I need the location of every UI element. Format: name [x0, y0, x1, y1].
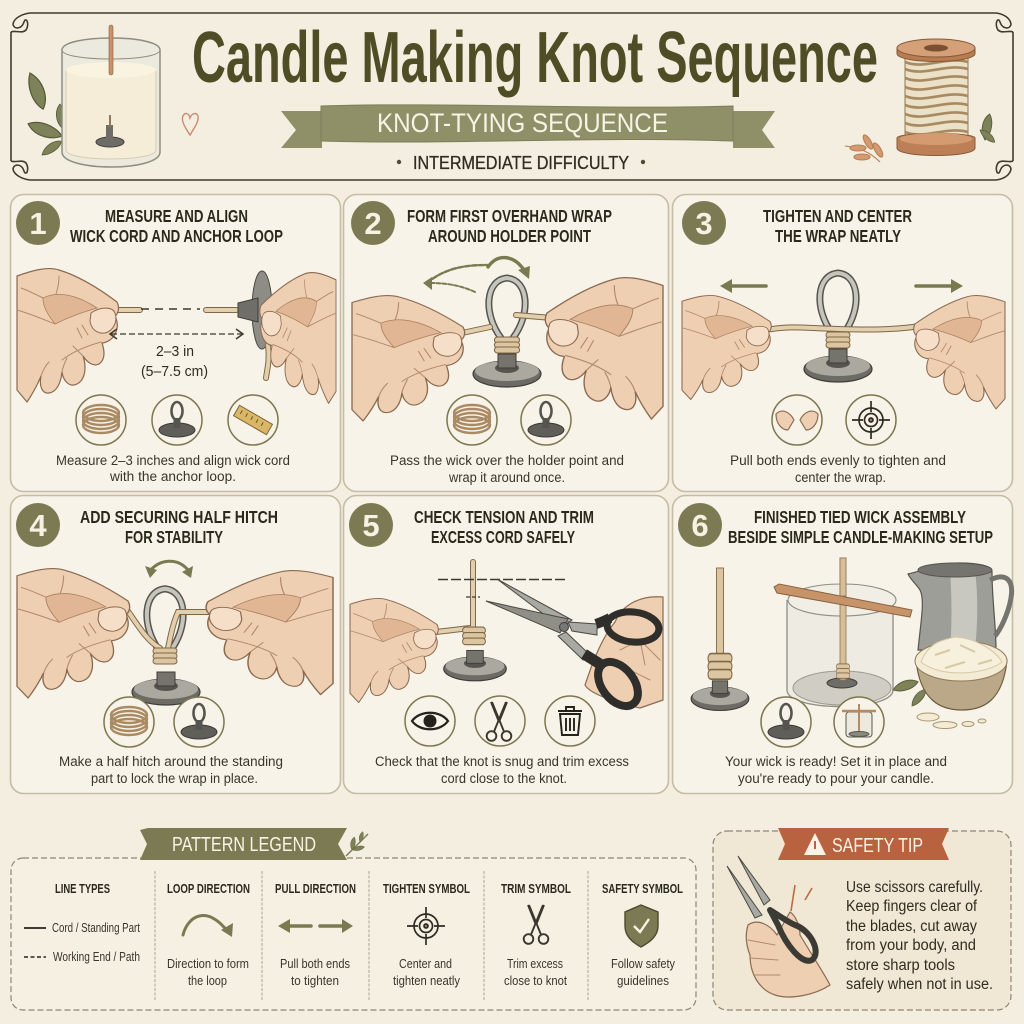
step number 3: 3: [695, 206, 713, 241]
legend: tighten symbol: [383, 881, 470, 988]
step 6 heading: FINISHED TIED WICK ASSEMBLY: [754, 507, 966, 527]
step 6 heading: [728, 507, 993, 547]
step 2 heading: AROUND HOLDER POINT: [428, 226, 591, 246]
step 2 instruction: [390, 453, 624, 485]
step 2 heading: [407, 206, 612, 246]
illustration: half hitch: [17, 561, 333, 705]
legend: pull direction: PULL DIRECTION: [275, 881, 356, 896]
panel: step 2: [344, 194, 668, 492]
legend: loop direction: [167, 881, 250, 988]
illustration: trimming the cord: [350, 562, 663, 714]
icon: wick coil: [104, 697, 154, 747]
step 6 instruction: you're ready to pour your candle.: [738, 771, 934, 786]
candle in glass jar: [24, 25, 160, 167]
step 1 heading: MEASURE AND ALIGN: [105, 206, 248, 226]
panel: step 3: [672, 194, 1012, 492]
step 4 instruction: Make a half hitch around the standing: [59, 754, 283, 769]
step number 5: 5: [362, 508, 380, 543]
step number 2: [351, 201, 395, 245]
panel: step 1: [10, 194, 340, 492]
step 3 instruction: center the wrap.: [795, 470, 886, 485]
heart doodle: [182, 114, 198, 135]
illustration: bowl of wax flakes: [891, 637, 1007, 728]
illustration: pulling to tighten: [682, 273, 1005, 409]
measurement label: 2–3 in: [156, 343, 194, 360]
step 6 instruction: Your wick is ready! Set it in place and: [725, 754, 947, 769]
safety ribbon heading: SAFETY TIP: [832, 835, 923, 857]
step 4 instruction: [59, 754, 283, 786]
icon: anchor: [152, 395, 202, 445]
safety ribbon heading: [778, 828, 949, 860]
icon: wick in glass: [834, 697, 884, 747]
legend: loop direction: Direction to form: [167, 957, 249, 971]
legend: line types: Working End / Path: [53, 950, 140, 964]
legend ribbon heading: PATTERN LEGEND: [172, 834, 316, 856]
safety text: from your body, and: [846, 937, 976, 954]
legend: pull direction: Pull both ends: [280, 957, 350, 971]
step number 4: 4: [29, 508, 47, 543]
legend ribbon heading: [140, 828, 347, 860]
step 4 heading: [80, 507, 278, 547]
legend: tighten symbol: TIGHTEN SYMBOL: [383, 881, 470, 896]
step 5 instruction: Check that the knot is snug and trim excess: [375, 754, 629, 769]
legend: line types: [24, 881, 140, 964]
step 5 heading: CHECK TENSION AND TRIM: [414, 507, 594, 527]
measurement label: [141, 343, 208, 380]
legend: trim symbol: TRIM SYMBOL: [501, 881, 571, 896]
step number 1: [16, 201, 60, 245]
safety text: the blades, cut away: [846, 918, 977, 935]
ornamental frame: [11, 13, 1013, 180]
panel: step 6: [672, 496, 1012, 794]
icon: anchor: [521, 395, 571, 445]
illustration: wrapping around the holder: [352, 258, 663, 421]
legend: tighten symbol: Center and: [399, 957, 452, 971]
step 4 heading: ADD SECURING HALF HITCH: [80, 507, 278, 527]
legend: loop direction: the loop: [188, 974, 227, 988]
safety text: Keep fingers clear of: [846, 898, 978, 915]
step 1 instruction: Measure 2–3 inches and align wick cord: [56, 453, 290, 468]
step 3 instruction: [730, 453, 946, 485]
icon: scissors: [475, 696, 525, 746]
legend: pull direction: [275, 881, 356, 988]
icon: wick coil: [76, 395, 126, 445]
icon: trash can: [545, 696, 595, 746]
step 5 heading: [414, 507, 594, 547]
step 5 instruction: cord close to the knot.: [441, 771, 567, 786]
safety text: safely when not in use.: [846, 976, 993, 993]
illustration: finished wick: [691, 568, 749, 710]
step 4 heading: FOR STABILITY: [125, 527, 223, 547]
icon: anchor: [761, 697, 811, 747]
step 4 instruction: part to lock the wrap in place.: [91, 771, 258, 786]
safety text: Use scissors carefully.: [846, 879, 983, 896]
panel: step 5: [344, 496, 668, 794]
legend: tighten symbol: tighten neatly: [393, 974, 461, 988]
step number 6: 6: [691, 508, 709, 543]
difficulty line: INTERMEDIATE DIFFICULTY: [413, 152, 629, 173]
icon: wick coil: [447, 395, 497, 445]
step number 1: 1: [29, 206, 47, 241]
measurement label: (5–7.5 cm): [141, 363, 208, 380]
step 3 heading: THE WRAP NEATLY: [775, 226, 901, 246]
legend: safety symbol: SAFETY SYMBOL: [602, 881, 683, 896]
panel: pattern legend: [11, 828, 696, 1010]
step number 2: 2: [364, 206, 382, 241]
illustration: glass with centering stick: [774, 558, 912, 706]
step number 3: [682, 201, 726, 245]
step 5 heading: EXCESS CORD SAFELY: [431, 527, 575, 547]
illustration: hand holding scissors: [727, 856, 830, 997]
legend: pull direction: to tighten: [291, 974, 339, 988]
step 6 instruction: [725, 754, 947, 786]
legend: loop direction: LOOP DIRECTION: [167, 881, 250, 896]
ribbon subtitle: KNOT-TYING SEQUENCE: [377, 108, 668, 138]
step 2 heading: FORM FIRST OVERHAND WRAP: [407, 206, 612, 226]
step 1 heading: WICK CORD AND ANCHOR LOOP: [70, 226, 283, 246]
step 5 instruction: [375, 754, 629, 786]
panel: safety tip: [713, 828, 1011, 1010]
step number 6: [678, 503, 722, 547]
legend: safety symbol: [602, 881, 683, 988]
step 1 instruction: [56, 453, 290, 484]
wick spool: [845, 39, 997, 162]
illustration: pouring pitcher: [908, 563, 1012, 650]
icon: measuring tape: [228, 395, 278, 445]
step 2 instruction: Pass the wick over the holder point and: [390, 453, 624, 468]
ribbon subtitle: [281, 105, 775, 148]
panel: step 4: [10, 496, 340, 794]
safety text: store sharp tools: [846, 957, 955, 974]
legend: trim symbol: Trim excess: [507, 957, 563, 971]
step 3 heading: [763, 206, 912, 246]
safety text: [846, 879, 993, 993]
legend: trim symbol: close to knot: [504, 974, 567, 988]
legend: line types: LINE TYPES: [55, 881, 110, 896]
icon: hands pulling: [772, 395, 822, 445]
legend: safety symbol: Follow safety: [611, 957, 676, 971]
step number 5: [349, 503, 393, 547]
step 2 instruction: wrap it around once.: [448, 470, 565, 485]
step 3 instruction: Pull both ends evenly to tighten and: [730, 453, 946, 468]
step 1 instruction: with the anchor loop.: [109, 469, 236, 484]
icon: anchor: [174, 697, 224, 747]
icon: target: [846, 395, 896, 445]
legend: trim symbol: [501, 881, 571, 988]
step 1 heading: [70, 206, 283, 246]
header banner: [11, 13, 1013, 180]
leaf sprig: [346, 831, 368, 856]
legend: line types: Cord / Standing Part: [52, 921, 140, 935]
legend: safety symbol: guidelines: [617, 974, 669, 988]
step number 4: [16, 503, 60, 547]
icon: eye: [405, 696, 455, 746]
illustration: measuring wick between hands: [17, 269, 336, 403]
step 3 heading: TIGHTEN AND CENTER: [763, 206, 912, 226]
